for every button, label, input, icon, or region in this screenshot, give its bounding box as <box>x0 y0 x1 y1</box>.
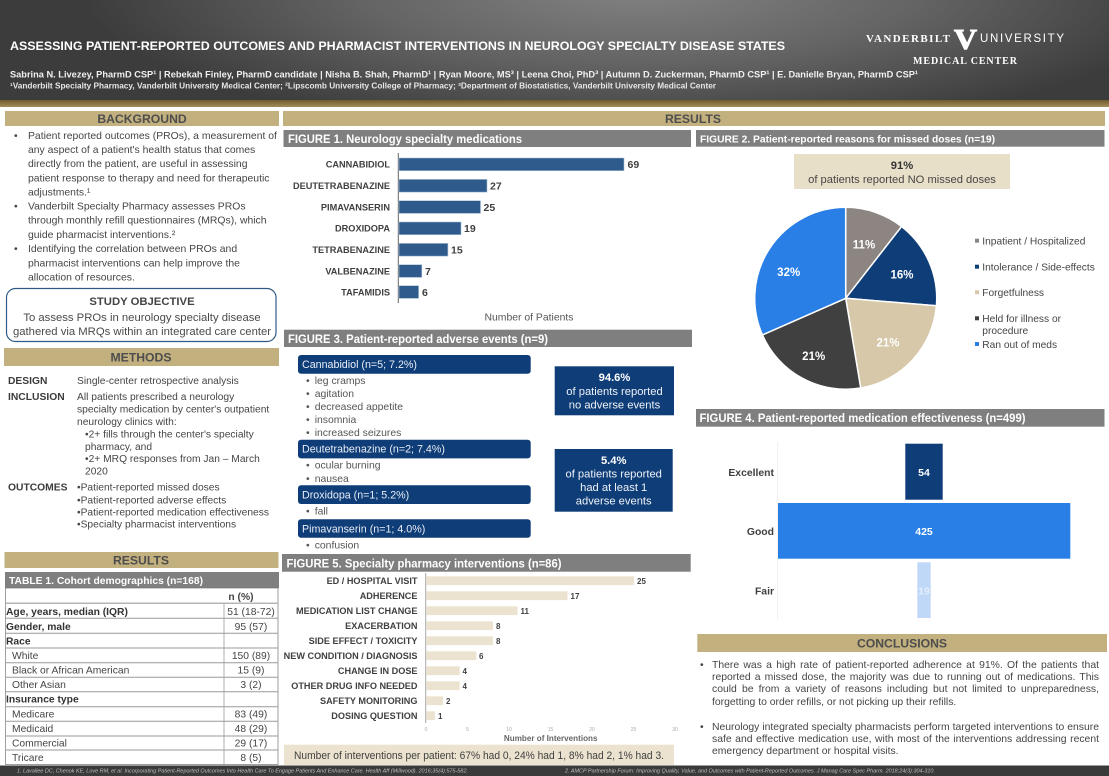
panel: figure 5 specialty pharmacy interventions <box>282 554 691 765</box>
cannabidiol adverse events <box>298 355 531 439</box>
methods: inclusion: All patients prescribed a neurology <box>77 392 235 403</box>
table 1: cohort demographics: Race <box>6 636 31 648</box>
title: ASSESSING PATIENT-REPORTED OUTCOMES AND PHARMACIST INTERVENTIONS IN NEUROLOGY SPECIALTY DISEASE STATES <box>10 39 785 53</box>
bar chart: medications: 27 <box>490 180 502 192</box>
deutetrabenazine adverse events: Deutetrabenazine (n=2; 7.4%) <box>302 444 445 456</box>
header banner <box>0 0 1109 107</box>
bar chart: interventions: 30 <box>672 727 678 733</box>
logo: Vanderbilt University Medical Center: V <box>954 24 977 56</box>
bar chart: medications <box>293 153 639 324</box>
pie chart: reasons: 32% <box>777 267 800 279</box>
background text: adjustments.¹ <box>28 187 91 198</box>
cannabidiol adverse events: • <box>306 376 310 387</box>
bar chart: interventions: SAFETY MONITORING <box>320 696 418 706</box>
pie legend: Inpatient / Hospitalized <box>982 236 1086 248</box>
callout: no missed doses: 91% <box>891 160 913 172</box>
heading: methods: METHODS <box>111 350 171 364</box>
figure 4 heading: FIGURE 4. Patient-reported medication effectiveness (n=499) <box>700 413 1026 425</box>
table 1: cohort demographics: 95 (57) <box>235 622 267 633</box>
figure 1 heading: FIGURE 1. Neurology specialty medications <box>288 134 522 146</box>
heading: conclusions: CONCLUSIONS <box>857 636 947 650</box>
bar chart: interventions: 6 <box>479 652 484 661</box>
background text: pharmacist interventions can help improve the <box>28 258 240 269</box>
table 1: cohort demographics: 51 (18-72) <box>227 607 275 618</box>
bar chart: interventions <box>284 573 678 743</box>
text: Neurology integrated specialty pharmacists perform targeted interventions to ensure <box>712 722 1099 732</box>
bar chart: medications: VALBENAZINE <box>325 266 390 276</box>
bar chart: interventions: 1 <box>438 712 443 721</box>
bar chart: effectiveness: 54 <box>918 467 930 479</box>
bar chart: interventions: 2 <box>446 697 451 706</box>
bar chart: interventions: MEDICATION LIST CHANGE <box>296 606 418 616</box>
bar chart: interventions: OTHER DRUG INFO NEEDED <box>291 681 418 691</box>
bar chart: interventions: SIDE EFFECT / TOXICITY <box>309 636 418 646</box>
callout: interventions per patient: Number of interventions per patient: 67% had 0, 24% had 1, 8% had 2, 1% had 3. <box>294 750 664 762</box>
deutetrabenazine adverse events: ocular burning <box>315 461 381 472</box>
droxidopa adverse events: • <box>306 506 310 517</box>
panel: results left with table <box>4 552 279 764</box>
deutetrabenazine adverse events: • <box>306 461 310 472</box>
heading: results main: RESULTS <box>665 112 721 126</box>
table 1: cohort demographics: Black or African American <box>12 666 130 676</box>
text: reported a missed dose, the majority was due to running out of medications. This <box>712 672 1099 683</box>
pie legend: Forgetfulness <box>982 288 1044 299</box>
methods: design: DESIGN <box>8 376 47 387</box>
table 1: cohort demographics: Medicare <box>12 710 55 720</box>
bar chart: interventions: 10 <box>506 727 512 733</box>
background text: any aspect of a patient's health status that comes <box>28 145 255 156</box>
methods: inclusion: •2+ fills through the center's specialty <box>85 430 255 441</box>
bar chart: medications: TETRABENAZINE <box>312 245 390 255</box>
methods: inclusion: •2+ MRQ responses from Jan – March <box>85 454 260 465</box>
bar chart: interventions: EXACERBATION <box>345 621 418 631</box>
table 1: cohort demographics: Commercial <box>12 738 67 750</box>
heading: results main <box>283 111 1105 126</box>
cannabidiol adverse events: Cannabidiol (n=5; 7.2%) <box>302 359 417 371</box>
bar chart: medications: DROXIDOPA <box>335 224 390 234</box>
callout: study objective <box>6 288 276 342</box>
table 1 header <box>5 572 279 588</box>
methods: design: Single-center retrospective analysis <box>77 376 239 387</box>
table 1: cohort demographics: 83 (49) <box>235 710 267 720</box>
panel: background <box>5 111 279 283</box>
methods: outcomes: •Patient-reported missed doses <box>77 483 220 494</box>
table 1: cohort demographics: 8 (5) <box>240 753 262 764</box>
table 1: cohort demographics: Gender, male <box>6 622 71 633</box>
table 1: cohort demographics: Tricare <box>12 753 44 764</box>
callout: at least one adverse event <box>555 449 673 512</box>
pimavanserin adverse events: Pimavanserin (n=1; 4.0%) <box>302 523 425 535</box>
background text: • <box>14 244 18 255</box>
background text <box>14 131 277 283</box>
bar chart: interventions: 25 <box>631 727 636 733</box>
bar chart: medications: 69 <box>628 159 639 171</box>
text: • <box>700 660 704 670</box>
table 1: cohort demographics: Other Asian <box>12 680 66 691</box>
text: There was a high rate of patient-reported adherence at 91%. Of the patients that <box>712 660 1099 670</box>
callout: at least one adverse event: adverse events <box>576 496 652 508</box>
background text: guide pharmacist interventions.² <box>28 230 176 241</box>
heading: results: RESULTS <box>113 554 169 568</box>
callout: at least one adverse event: of patients reported <box>565 468 662 480</box>
deutetrabenazine adverse events <box>298 440 531 485</box>
logo: Vanderbilt University Medical Center: UNIVERSITY <box>980 33 1064 45</box>
methods: inclusion: INCLUSION <box>8 392 65 403</box>
bar chart: medications: TAFAMIDIS <box>341 288 390 298</box>
text: forgetting to order refills, or not picking up their refills. <box>712 697 956 708</box>
table 1: cohort demographics: Insurance type <box>6 694 79 706</box>
callout: at least one adverse event: 5.4% <box>601 455 627 467</box>
footer references <box>0 766 1109 776</box>
methods: inclusion <box>8 392 269 477</box>
table 1: cohort demographics: n (%) <box>228 592 254 603</box>
background text: • <box>14 131 18 142</box>
methods: inclusion: 2020 <box>85 466 108 477</box>
table 1 header: TABLE 1. Cohort demographics (n=168) <box>9 576 203 587</box>
bar chart: effectiveness: Excellent <box>728 468 775 479</box>
bar chart: medications: Number of Patients <box>485 313 573 324</box>
cannabidiol adverse events: • <box>306 428 310 439</box>
figure 3 heading: FIGURE 3. Patient-reported adverse events (n=9) <box>288 334 548 346</box>
table 1: cohort demographics: White <box>12 651 39 662</box>
callout: no adverse events <box>555 366 674 415</box>
callout: no adverse events: 94.6% <box>599 372 630 384</box>
methods: inclusion: neurology clinics with: <box>77 417 177 428</box>
text: could be from a variety of reasons including but not limited to unpreparedness, <box>712 684 1099 695</box>
table 1: cohort demographics: Medicaid <box>12 724 53 735</box>
pie legend: Ran out of meds <box>982 340 1057 351</box>
background text: patient response to therapy and need for therapeutic <box>28 173 269 184</box>
bar chart: effectiveness: 19 <box>918 586 930 598</box>
bar chart: interventions: 5 <box>466 727 469 733</box>
background text: Identifying the correlation between PROs and <box>28 244 237 255</box>
cannabidiol adverse events: • <box>306 402 310 413</box>
pie legend: procedure <box>982 326 1029 337</box>
text: safe and effective medication use, with most of the interventions addressing recent <box>712 734 1099 744</box>
text: • <box>700 722 704 732</box>
pimavanserin adverse events <box>298 519 531 551</box>
callout: at least one adverse event: had at least 1 <box>580 482 647 494</box>
bar chart: effectiveness: Fair <box>755 586 774 597</box>
callout: no adverse events: no adverse events <box>569 400 661 412</box>
pie legend <box>975 236 1095 351</box>
droxidopa adverse events <box>298 485 531 517</box>
methods: outcomes: •Patient-reported medication effectiveness <box>77 508 269 518</box>
bar chart: interventions: 8 <box>496 637 501 646</box>
bar chart: medications: 15 <box>451 244 463 256</box>
bar chart: effectiveness: Good <box>747 527 774 538</box>
table 1: cohort demographics: 15 (9) <box>238 666 264 676</box>
methods: inclusion: specialty medication by center's outpatient <box>77 404 269 416</box>
table 1: cohort demographics: 48 (29) <box>235 724 267 735</box>
bar chart: interventions: 17 <box>570 592 580 601</box>
background text: through monthly refill questionnaires (MRQs), which <box>28 216 267 227</box>
table 1: cohort demographics: 150 (89) <box>232 651 270 662</box>
bar chart: medications: 7 <box>425 266 431 278</box>
panel: figure 2 reasons for missed doses <box>696 130 1104 389</box>
text: emergency department or hospital visits. <box>712 746 899 757</box>
bar chart: interventions: CHANGE IN DOSE <box>338 666 418 676</box>
droxidopa adverse events: fall <box>315 506 328 517</box>
bar chart: interventions: 15 <box>548 727 553 733</box>
footer references: 2. AMCP Partnership Forum: Improving Quality, Value, and Outcomes with Patient-Reported Outcomes. J Manag Care Spec Pharm. 2018;24(3):304-310. <box>564 768 935 774</box>
pie chart: reasons <box>755 207 937 389</box>
bar chart: medications: PIMAVANSERIN <box>321 202 390 212</box>
pie legend: Intolerance / Side-effects <box>982 262 1095 274</box>
background text: Vanderbilt Specialty Pharmacy assesses PROs <box>28 202 246 213</box>
bar chart: medications: CANNABIDIOL <box>326 160 390 170</box>
pie chart: reasons: 21% <box>876 338 900 350</box>
methods: outcomes: •Patient-reported adverse effects <box>77 495 226 506</box>
table 1: cohort demographics <box>6 588 278 764</box>
figure 2 heading: FIGURE 2. Patient-reported reasons for missed doses (n=19) <box>700 134 995 146</box>
cannabidiol adverse events: • <box>306 415 310 426</box>
table 1: cohort demographics: 3 (2) <box>240 680 262 691</box>
background text: Patient reported outcomes (PROs), a measurement of <box>28 131 277 142</box>
bar chart: interventions: 0 <box>425 727 428 733</box>
background text: allocation of resources. <box>28 272 135 283</box>
bar chart: medications: DEUTETRABENAZINE <box>293 181 390 191</box>
methods: outcomes: •Specialty pharmacist interventions <box>77 520 236 531</box>
callout: study objective: gathered via MRQs within an integrated care center <box>13 326 271 338</box>
panel: figure 3 adverse events <box>284 330 692 551</box>
callout: no adverse events: of patients reported <box>566 386 663 398</box>
footer references: 1. Lavallee DC, Chenok KE, Love RM, et al. Incorporating Patient-Reported Outcomes Into Health Care To Engage Patients And Enhance Care. Health Aff (Millwood). 2016;35(4):575-582. <box>17 768 468 774</box>
cannabidiol adverse events: increased seizures <box>315 428 401 439</box>
background text: directly from the patient, are useful in assessing <box>28 159 248 170</box>
deutetrabenazine adverse events: • <box>306 474 310 485</box>
pie legend: Held for illness or <box>982 314 1062 325</box>
table 1: cohort demographics: 29 (17) <box>235 738 267 750</box>
cannabidiol adverse events: • <box>306 389 310 400</box>
heading: background: BACKGROUND <box>97 112 187 126</box>
bar chart: interventions: ADHERENCE <box>360 591 418 601</box>
pie chart: reasons: 16% <box>890 270 914 282</box>
affiliations: ¹Vanderbilt Specialty Pharmacy, Vanderbilt University Medical Center; ²Lipscomb University College of Pharmacy; ³Department of Biostatistics, Vanderbilt University Medical Center <box>10 82 716 90</box>
bar chart: medications: 6 <box>422 287 428 299</box>
logo: Vanderbilt University Medical Center <box>866 24 1064 67</box>
bar chart: interventions: 4 <box>462 682 468 691</box>
bar chart: interventions: 8 <box>496 622 501 631</box>
bar chart: interventions: DOSING QUESTION <box>331 711 418 721</box>
methods: inclusion: pharmacy, and <box>85 442 152 453</box>
droxidopa adverse events: Droxidopa (n=1; 5.2%) <box>302 490 409 502</box>
bar chart: interventions: 25 <box>637 577 646 586</box>
conclusions text <box>700 660 1099 757</box>
callout: no missed doses <box>794 154 1010 189</box>
pie chart: reasons: 11% <box>853 240 875 252</box>
heading: conclusions <box>697 634 1107 652</box>
panel: figure 1 neurology specialty medications <box>284 130 691 324</box>
logo: Vanderbilt University Medical Center: VANDERBILT <box>866 33 951 45</box>
callout: study objective: STUDY OBJECTIVE <box>89 296 195 308</box>
bar chart: effectiveness <box>728 442 1070 620</box>
cannabidiol adverse events: agitation <box>315 389 354 400</box>
pimavanserin adverse events: • <box>306 540 310 551</box>
callout: study objective: To assess PROs in neurology specialty disease <box>23 312 261 324</box>
methods: outcomes: OUTCOMES <box>8 483 68 494</box>
logo: Vanderbilt University Medical Center: MEDICAL CENTER <box>913 56 1018 67</box>
pimavanserin adverse events: confusion <box>315 540 359 551</box>
cannabidiol adverse events: insomnia <box>315 415 357 426</box>
bar chart: effectiveness: 425 <box>915 526 933 538</box>
deutetrabenazine adverse events: nausea <box>315 474 349 485</box>
callout: interventions per patient <box>284 745 674 765</box>
panel: methods <box>4 348 279 531</box>
authors: Sabrina N. Livezey, PharmD CSP¹ | Rebekah Finley, PharmD candidate | Nisha B. Shah, PharmD¹ | Ryan Moore, MS³ | Leena Choi, PhD³ | Autumn D. Zuckerman, PharmD CSP¹ | E. Danielle Bryan, PharmD CSP¹ <box>10 70 918 80</box>
bar chart: interventions: 4 <box>462 667 468 676</box>
bar chart: interventions: NEW CONDITION / DIAGNOSIS <box>284 651 418 661</box>
figure 5 heading: FIGURE 5. Specialty pharmacy interventions (n=86) <box>286 558 562 570</box>
bar chart: interventions: 20 <box>589 727 595 733</box>
bar chart: medications: 19 <box>464 223 476 235</box>
cannabidiol adverse events: decreased appetite <box>315 402 403 413</box>
table 1: cohort demographics: Age, years, median (IQR) <box>6 607 128 618</box>
pie chart: reasons: 21% <box>802 351 825 363</box>
bar chart: interventions: Number of Interventions <box>504 734 598 743</box>
cannabidiol adverse events: leg cramps <box>315 376 366 387</box>
background text: • <box>14 202 18 213</box>
panel: figure 4 medication effectiveness <box>696 409 1104 620</box>
methods: outcomes <box>8 483 269 531</box>
bar chart: interventions: 11 <box>520 607 530 616</box>
callout: no missed doses: of patients reported NO missed doses <box>808 174 996 186</box>
bar chart: interventions: ED / HOSPITAL VISIT <box>327 576 418 586</box>
bar chart: medications: 25 <box>484 202 495 214</box>
